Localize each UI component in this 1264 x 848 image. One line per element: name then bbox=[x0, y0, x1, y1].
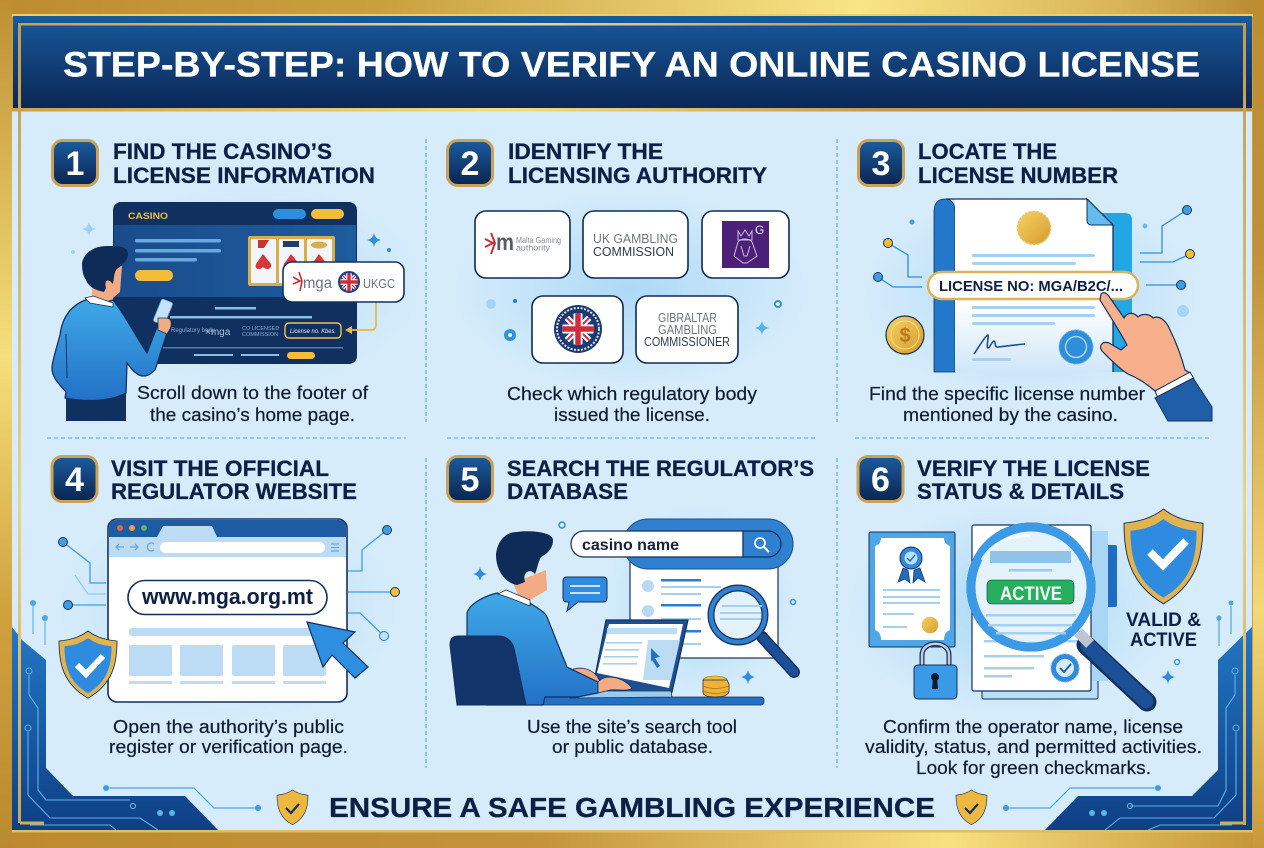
illustration: certificate bbox=[845, 505, 1234, 715]
illustration: casino site: mga bbox=[303, 275, 332, 292]
document stack bbox=[972, 525, 1117, 699]
logo: purple crest: G bbox=[755, 223, 764, 237]
illustration: casino site: CO LICENSED bbox=[242, 326, 279, 332]
panel: step 2 licensing authority bbox=[448, 139, 810, 425]
heading 2 bbox=[508, 139, 767, 188]
bottom-left circuit corner bbox=[12, 627, 261, 830]
heading 4: REGULATOR WEBSITE bbox=[111, 479, 357, 504]
heading 1: LICENSE INFORMATION bbox=[113, 163, 375, 188]
badge 6: 6 bbox=[871, 461, 890, 499]
icon: right footer shield bbox=[956, 790, 987, 825]
heading 2: IDENTIFY THE bbox=[508, 139, 663, 164]
badge 6 bbox=[858, 456, 903, 502]
badge 4: 4 bbox=[65, 461, 84, 499]
icon: gold coin: $ bbox=[899, 325, 911, 347]
description 1: the casino’s home page. bbox=[150, 405, 355, 425]
logo: union flag seal bbox=[532, 296, 623, 363]
illustration: casino site: Regulatory body bbox=[171, 328, 215, 334]
heading 4 bbox=[111, 456, 357, 504]
panel: step 6 verify status bbox=[845, 456, 1234, 778]
badge 3: 3 bbox=[872, 145, 890, 183]
description 3 bbox=[869, 384, 1145, 425]
heading 3 bbox=[918, 139, 1118, 188]
badge 1 bbox=[52, 140, 98, 186]
logo: UK Gambling Commission bbox=[583, 211, 688, 278]
description 2: issued the license. bbox=[554, 405, 710, 425]
icon: pointing hand bbox=[1100, 293, 1212, 421]
heading 5 bbox=[507, 456, 814, 504]
badge 5: 5 bbox=[461, 461, 479, 499]
icon: person with phone bbox=[52, 246, 173, 421]
badge 2: 2 bbox=[461, 145, 479, 183]
valid and active label bbox=[1126, 610, 1201, 651]
badge 5 bbox=[448, 456, 492, 502]
icon: magnifier bbox=[711, 588, 794, 672]
heading 6: STATUS & DETAILS bbox=[917, 479, 1124, 504]
icon: cursor arrow bbox=[307, 622, 368, 678]
icon: large shield bbox=[1124, 509, 1203, 604]
description 2 bbox=[507, 384, 757, 425]
icon: magnifier with active status bbox=[969, 525, 1147, 702]
icon: security shield bbox=[59, 631, 117, 698]
icon: gold coin bbox=[886, 316, 924, 354]
heading 1 bbox=[113, 139, 375, 188]
logo: Malta Gaming Authority: Malta Gaming bbox=[516, 235, 561, 245]
URL pill: www.mga.org.mt bbox=[141, 584, 314, 609]
valid and active label: ACTIVE bbox=[1130, 630, 1197, 651]
dashed dividers bbox=[47, 139, 1212, 768]
logo: Gibraltar Gambling Commissioner bbox=[636, 296, 738, 363]
illustration: casino site: License no. Kbes. bbox=[290, 328, 336, 335]
illustration: casino site: CASINO bbox=[128, 211, 168, 222]
icon: coin stack bbox=[703, 676, 729, 697]
description 3: Find the specific license number bbox=[869, 384, 1145, 404]
illustration: casino site: ×mga bbox=[205, 327, 231, 338]
badge 1: 1 bbox=[66, 145, 84, 183]
logo: Malta Gaming Authority: authority bbox=[516, 242, 551, 252]
license number pill bbox=[928, 272, 1138, 299]
panel: step 3 license number bbox=[858, 139, 1212, 425]
heading 5: DATABASE bbox=[507, 479, 628, 504]
license number pill: LICENSE NO: MGA/B2C/... bbox=[939, 278, 1123, 295]
icon: left footer shield bbox=[277, 790, 308, 825]
description 4: Open the authority’s public bbox=[113, 717, 344, 737]
description 1 bbox=[137, 383, 369, 425]
heading 3: LICENSE NUMBER bbox=[918, 163, 1118, 188]
URL pill bbox=[128, 580, 327, 614]
badge 3 bbox=[858, 140, 904, 186]
footer banner bbox=[277, 790, 987, 825]
description 6: validity, status, and permitted activities. bbox=[865, 737, 1202, 757]
icon: magnifier with active status: ACTIVE bbox=[1000, 583, 1062, 605]
illustration: casino site bbox=[71, 180, 425, 390]
description 4 bbox=[109, 717, 348, 757]
illustration: casino site: UKGC bbox=[363, 277, 395, 291]
description 2: Check which regulatory body bbox=[507, 384, 757, 404]
logo: Gibraltar Gambling Commissioner: GAMBLING bbox=[658, 323, 717, 337]
logo: Malta Gaming Authority bbox=[475, 211, 570, 278]
description 3: mentioned by the casino. bbox=[903, 405, 1118, 425]
heading 6 bbox=[917, 456, 1150, 504]
illustration: results panel bbox=[473, 505, 796, 695]
badge 4 bbox=[52, 456, 97, 502]
icon: padlock bbox=[914, 644, 957, 699]
panel: step 5 search database bbox=[448, 456, 814, 757]
description 4: register or verification page. bbox=[109, 737, 348, 757]
description 6: Confirm the operator name, license bbox=[883, 717, 1183, 737]
icon: person at laptop bbox=[450, 531, 764, 705]
search bar: casino name bbox=[582, 537, 679, 554]
logo: Gibraltar Gambling Commissioner: COMMISSIONER bbox=[644, 335, 730, 349]
title: STEP-BY-STEP: HOW TO VERIFY AN ONLINE CASINO LICENSE bbox=[63, 46, 1200, 84]
bottom-right circuit corner bbox=[1003, 627, 1252, 830]
logo: UK Gambling Commission: COMMISSION bbox=[593, 244, 674, 259]
heading 3: LOCATE THE bbox=[918, 139, 1057, 164]
logo: Gibraltar Gambling Commissioner: GIBRALTAR bbox=[658, 311, 717, 325]
description 5: or public database. bbox=[552, 737, 713, 757]
description 6: Look for green checkmarks. bbox=[916, 758, 1151, 778]
search bar bbox=[571, 519, 793, 569]
header banner bbox=[12, 14, 1253, 112]
heading 4: VISIT THE OFFICIAL bbox=[111, 456, 329, 481]
description 5: Use the site’s search tool bbox=[527, 717, 737, 737]
illustration: browser window bbox=[30, 495, 403, 725]
description 1: Scroll down to the footer of bbox=[137, 383, 369, 403]
logo: Malta Gaming Authority: m bbox=[496, 229, 514, 255]
heading 6: VERIFY THE LICENSE bbox=[917, 456, 1150, 481]
logo: purple crest bbox=[702, 211, 789, 278]
heading 2: LICENSING AUTHORITY bbox=[508, 163, 767, 188]
description 6 bbox=[865, 717, 1202, 778]
footer text: ENSURE A SAFE GAMBLING EXPERIENCE bbox=[329, 792, 935, 823]
icon: chat bubble bbox=[563, 577, 607, 611]
logo: UK Gambling Commission: UK GAMBLING bbox=[593, 231, 678, 246]
badge 2 bbox=[448, 140, 492, 186]
panel: step 4 regulator website bbox=[30, 456, 403, 757]
valid and active label: VALID & bbox=[1126, 610, 1201, 631]
description 5 bbox=[527, 717, 737, 757]
illustration: license document bbox=[860, 190, 1200, 400]
illustration: casino site: COMMISSION bbox=[242, 332, 278, 338]
heading 1: FIND THE CASINO’S bbox=[113, 139, 332, 164]
illustration: regulator logos bbox=[450, 190, 810, 390]
heading 5: SEARCH THE REGULATOR’S bbox=[507, 456, 814, 481]
panel: step 1 find license information bbox=[52, 139, 425, 425]
